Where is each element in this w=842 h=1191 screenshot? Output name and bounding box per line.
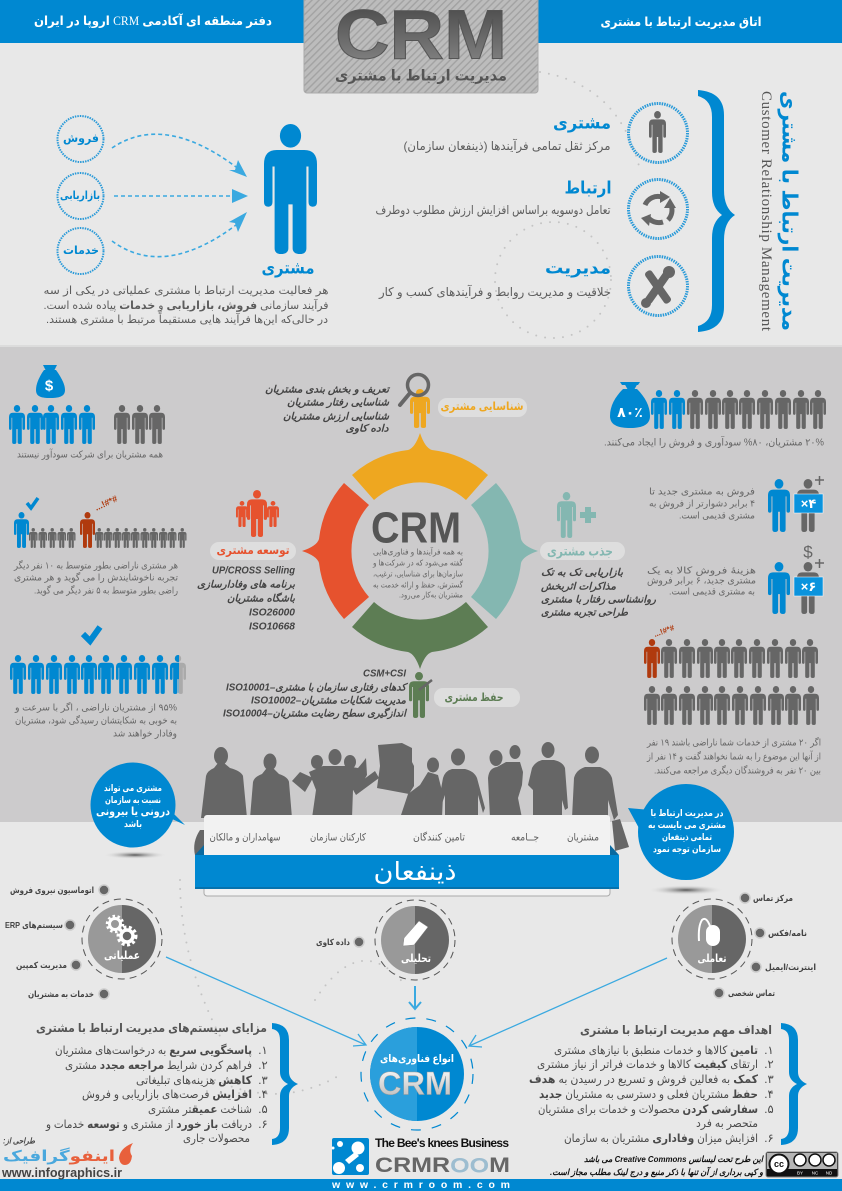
definition: management: مدیریت [545, 258, 611, 278]
system: interactive: تعاملی [698, 953, 726, 965]
stage: develop: برنامه های وفادارسازی [197, 580, 295, 590]
stakeholders card: ذینفعان [374, 858, 456, 886]
stat: profitable customers: همه مشتریان برای شرکت سودآور نیستند [17, 448, 163, 460]
stat: silent customers: بین ۲۰ نفر به فروشندگان دیگری مراجعه می‌کنند. [654, 764, 821, 776]
stakeholders card: کارکنان سازمان [310, 832, 366, 844]
system labels: داده کاوی [316, 937, 351, 948]
segment: retain [352, 602, 488, 669]
icon: mouse [706, 925, 720, 946]
crowd silhouettes [194, 742, 629, 855]
stat: word of mouth: ...!#*# [93, 493, 119, 513]
badge 6x [794, 577, 823, 596]
panel: goals: ۶. [764, 1133, 774, 1145]
stat: 6x cost: $ [803, 542, 813, 562]
stat: 80/20: ۸۰٪ [617, 404, 643, 420]
stat: 4x harder: ×۴ [801, 496, 816, 511]
callout right: تمامی ذینفعان [662, 832, 712, 842]
system labels: تماس شخصی [728, 988, 775, 999]
CRM room logo: The Bee's knees Business [375, 1136, 509, 1150]
panel: benefits: ۴. [258, 1089, 268, 1101]
bottom bar [0, 1179, 842, 1191]
definition: customer: مشتری [553, 114, 611, 134]
stat: 6x cost: مشتری جدید، ۶ برابر فروش [647, 576, 756, 586]
definition: customer [404, 104, 688, 162]
panel: benefits: محصولات جاری [183, 1133, 250, 1146]
arrows to customer [112, 134, 240, 257]
badge 4x [794, 494, 823, 513]
center logo CRM: CRM [371, 504, 461, 552]
icon: three people [236, 490, 279, 537]
stage: develop [197, 490, 296, 632]
stat: word of mouth [13, 493, 186, 596]
stage: identify: شناسایی رفتار مشتریان [287, 398, 390, 408]
CRM room logo: CRMR OO M [375, 1154, 510, 1177]
heading: اهداف مهم مدیریت ارتباط با مشتری [580, 1023, 772, 1037]
callout left [90, 762, 185, 859]
stat: profitable customers [9, 365, 165, 460]
stat: silent customers: ...!#*# [652, 623, 676, 639]
panel: goals [529, 1023, 807, 1146]
stat: word of mouth: راضی بطور متوسط به ۵ نفر دیگر می گوید. [34, 584, 178, 596]
icon: money bag [36, 365, 65, 398]
title panel [304, 0, 538, 93]
people row [9, 405, 95, 444]
icon: 80 percent bag [610, 382, 650, 428]
stage: develop: ISO10668 [249, 622, 295, 632]
panel: goals: حفظ مشتریان فعلی و دسترسی به مشتریان جدید [539, 1089, 758, 1102]
definition: relationship: ارتباط [564, 178, 612, 198]
panel: benefits: دریافت باز خورد از مشتری و توسعه خدمات و [45, 1119, 252, 1132]
stage: develop: توسعه مشتری [216, 545, 290, 558]
label: marketing: بازاریابی [60, 190, 100, 202]
center hub: انواع فناوری‌های [380, 1053, 454, 1065]
center description: گفته می‌شود که در شرکت‌ها و [372, 558, 463, 568]
stakeholders card [195, 815, 619, 896]
panel: benefits: شناخت عمیقتر مشتری [148, 1104, 252, 1117]
icon: check [27, 498, 38, 508]
logo mark [332, 1141, 364, 1174]
intro paragraph: فرآیند سازمانی فروش، بازاریابی و خدمات پیاده شده است. [44, 298, 329, 312]
stage: retain: کدهای رفتاری سازمان با مشتری–ISO10001 [226, 682, 408, 694]
panel: benefits: ۳. [258, 1075, 268, 1087]
panel: benefits [36, 1021, 298, 1146]
stat: complaint handling: به خوبی به شکایتشان رسیدگی شود، مشتریان [15, 714, 177, 726]
stage: identify: تعریف و بخش بندی مشتریان [265, 384, 390, 396]
stakeholders card: جــامعه [511, 832, 539, 844]
definition: relationship [376, 178, 688, 238]
center description: به همه فرآیندها و فناوری‌هایی [373, 546, 463, 556]
panel: benefits: ۱. [258, 1045, 268, 1057]
header left text: دفتر منطقه ای آکادمی CRM اروپا در ایران [34, 13, 272, 28]
stat: complaint handling: ۹۵% از مشتریان ناراضی ، اگر با سرعت و [14, 702, 178, 714]
designer logo [1, 1136, 133, 1180]
stat: word of mouth: هر مشتری ناراضی بطور متوسط به ۱۰ نفر دیگر [13, 560, 178, 572]
stage: retain: اندازگیری سطح رضایت مشتریان–ISO10004 [223, 706, 408, 720]
callout right: سازمان توجه نمود [653, 844, 721, 855]
stat: 6x cost: هزینهٔ فروش کالا به یک [647, 566, 756, 576]
stage: identify: شناسایی ارزش مشتریان [283, 412, 390, 422]
system: operational [82, 899, 162, 979]
callout right: مشتری می بایست به [648, 820, 726, 831]
center description [372, 546, 463, 600]
header right text: اتاق مدیریت ارتباط با مشتری [600, 15, 762, 29]
designer logo: www.infographics.ir [1, 1166, 122, 1180]
system labels: خدمات به مشتریان [28, 989, 94, 1000]
intro paragraph: هر فعالیت مدیریت ارتباط با مشتری عملیاتی در یکی از سه [44, 285, 329, 297]
icon: cycle arrows [645, 196, 672, 223]
license text [550, 1154, 765, 1178]
stat: 4x harder: ۴ برابر دشوارتر از فروش به [649, 498, 755, 510]
vertical heading english: Customer Relationship Management [758, 91, 774, 332]
panel: goals: ۱. [764, 1045, 774, 1057]
CRM room logo [332, 1136, 510, 1177]
stage: develop: UP/CROSS Selling [212, 566, 295, 576]
cycle ring [302, 433, 538, 669]
connector arrows [166, 957, 667, 1047]
panel: benefits: پاسخگویی سریع به درخواست‌های مشتریان [55, 1043, 252, 1058]
system: operational: عملیاتی [104, 950, 140, 962]
stat: word of mouth: تجربه ناخوشایندش را می گوید و هر مشتری [14, 572, 178, 584]
icon: person [409, 672, 429, 718]
stat: silent customers: اگر ۲۰ مشتری از خدمات شما ناراضی باشند ۱۹ نفر [646, 736, 821, 748]
stage: attract: بازاریابی تک به تک [541, 568, 623, 578]
definition: management [378, 256, 688, 316]
stage: retain: مدیریت شکایات مشتریان–ISO10002 [251, 696, 407, 706]
stage: attract: روانشناسی رفتار با مشتری [541, 594, 656, 606]
panel: goals: ۲. [764, 1059, 774, 1071]
icon: tools [641, 266, 675, 308]
panel: goals: افزایش میزان وفاداری مشتریان به سازمان [564, 1133, 758, 1146]
url: www.crmroom.com [331, 1179, 510, 1191]
cc badge: ND [826, 1170, 833, 1176]
stakeholders card: مشتریان [567, 832, 599, 844]
icon: person [649, 111, 666, 153]
icon: pencil [403, 921, 428, 946]
ribbon [195, 845, 619, 855]
callout left: نسبت به سازمان [105, 795, 161, 806]
system labels [5, 885, 816, 1000]
cc badge: BY [797, 1170, 803, 1176]
arrowheads [229, 160, 248, 232]
stat: complaint handling [10, 627, 186, 740]
system labels: نامه/فکس [768, 928, 807, 939]
stat: 6x cost: ×۶ [801, 579, 816, 594]
system labels: مدیریت کمپین [16, 960, 67, 971]
stat: profitable customers: $ [45, 378, 54, 394]
strip under ribbon [204, 885, 610, 896]
stat: silent customers [644, 623, 821, 776]
header bar [0, 0, 842, 43]
definition: management: خلاقیت و مدیریت روابط و فرآیندهای کسب و کار [378, 284, 611, 300]
panel: goals: ۳. [764, 1074, 774, 1086]
system: interactive [672, 899, 752, 979]
stage: retain: CSM+CSI [363, 668, 406, 680]
stage: develop: باشگاه مشتریان [227, 592, 295, 604]
cc badge: NC [812, 1170, 819, 1176]
subtitle: مدیریت ارتباط با مشتری [335, 68, 507, 84]
panel: goals: ارتقای کیفیت کالاها و خدمات فراتر از نیاز مشتری [537, 1059, 758, 1072]
stage: develop: ISO26000 [249, 608, 295, 618]
callout left: درونی یا بیرونی [96, 806, 170, 818]
system labels: اینترنت/ایمیل [765, 962, 816, 973]
stat: complaint handling: وفادار خواهند شد [113, 728, 177, 740]
license text: این طرح تحت لیسانس Creative Commons می باشد [584, 1154, 765, 1165]
callout right [628, 784, 734, 895]
system labels: مرکز تماس [753, 893, 793, 904]
icon: person with magnifier [410, 389, 430, 428]
stage: attract [540, 492, 656, 618]
panel: benefits: کاهش هزینه‌های تبلیغاتی [136, 1075, 252, 1088]
stage: attract: مذاکرات اثربخش [540, 582, 617, 592]
icon: person plus [557, 492, 576, 538]
segment: identify [352, 433, 488, 500]
cc badge: cc [774, 1159, 784, 1169]
system: analytical [375, 900, 455, 980]
callout right: در مدیریت ارتباط با [650, 808, 724, 819]
license text: و کپی برداری از آن تنها با ذکر منبع و درج لینک مطلب مجاز است. [550, 1166, 763, 1178]
heading: مزایای سیستم‌های مدیریت ارتباط با مشتری [36, 1021, 267, 1035]
callout left: باشد [124, 819, 142, 829]
stat: 4x harder: مشتری قدیمی است. [679, 510, 755, 522]
stage: identify: شناسایی مشتری [440, 401, 524, 413]
system: analytical: تحلیلی [401, 953, 431, 965]
stakeholders card: سهامداران و مالکان [210, 832, 280, 844]
brace [781, 1023, 807, 1145]
panel: goals: سفارشی کردن محصولات و خدمات برای مشتریان [538, 1104, 758, 1117]
panel: goals: ۴. [764, 1089, 774, 1101]
icon: big check [83, 627, 100, 641]
cc badge [766, 1152, 838, 1177]
brace [272, 1023, 298, 1145]
panel: goals: کمک به فعالین فروش و تسریع در رسیدن به هدف [529, 1074, 758, 1087]
stat: 6x cost [647, 542, 824, 614]
bullets [65, 885, 765, 999]
panel: benefits: ۲. [258, 1060, 268, 1072]
label: sales: فروش [63, 133, 99, 146]
definition: customer: مرکز ثقل تمامی فرآیندها (ذینفعان سازمان) [404, 138, 610, 154]
center description: سازمان‌ها برای شناسایی، ترغیب، [373, 570, 463, 578]
definition: relationship: تعامل دوسویه براساس افزایش ارزش مطلوب دوطرف [376, 203, 610, 218]
segment: attract [471, 483, 538, 619]
designer logo: اینفوگرافیک [3, 1146, 115, 1164]
stat: 4x harder [649, 476, 824, 532]
big customer icon [264, 124, 317, 254]
callout left: مشتری می تواند [104, 783, 162, 794]
panel: benefits: افزایش فرصت‌های بازاریابی و فروش [82, 1089, 252, 1102]
stat: silent customers: از آنها این موضوع را به شما نخواهند گفت و ۱۴ نفر از [646, 750, 821, 762]
center description: گسترش، حفظ و ارائه خدمت به [373, 580, 463, 590]
stage: attract: طراحی تجربه مشتری [541, 608, 629, 618]
process circles [58, 116, 104, 274]
stage: attract: جذب مشتری [547, 544, 613, 558]
stage: identify [265, 374, 527, 434]
stakeholders card: تامین کنندگان [413, 832, 465, 844]
segment: develop [302, 483, 369, 619]
center hub: CRM [378, 1066, 452, 1102]
stat: 4x harder: فروش به مشتری جدید تا [649, 486, 755, 498]
icon: gears [107, 916, 136, 945]
grey section background [0, 345, 842, 822]
system labels: اتوماسیون نیروی فروش [10, 885, 94, 896]
stage: retain [223, 668, 520, 720]
stage: retain: حفظ مشتری [444, 692, 504, 704]
panel: goals: متحصر به فرد [696, 1118, 758, 1131]
decorative dots [180, 72, 640, 1094]
panel: benefits: ۶. [258, 1119, 268, 1131]
panel: goals: ۵. [764, 1104, 774, 1116]
intro paragraph: در حالی‌که این‌ها فرآیند هایی مستقیماً مرتبط با مشتری هستند. [46, 311, 328, 326]
center hub [361, 1018, 473, 1130]
stat: 80/20 [604, 382, 826, 448]
vertical heading persian: مدیریت ارتباط با مشتری [778, 91, 800, 331]
panel: benefits: ۵. [258, 1104, 268, 1116]
system labels: سیستم‌های ERP [5, 920, 63, 930]
center description: مشتریان به‌کار می‌رود. [399, 590, 463, 600]
big customer label: مشتری [262, 258, 314, 278]
stat: 6x cost: به مشتری قدیمی است. [669, 586, 755, 598]
stat: 80/20: ۲۰% مشتریان، ۸۰% سودآوری و فروش را ایجاد می‌کنند. [604, 436, 824, 448]
brace [698, 90, 735, 332]
designer logo: طراحی از: [3, 1136, 36, 1146]
label: services: خدمات [63, 245, 99, 257]
panel: goals: تامین کالاها و خدمات منطبق با نیازهای مشتری [554, 1045, 758, 1058]
intro paragraph [44, 285, 329, 326]
stage: identify: داده کاوی [346, 424, 389, 434]
panel: benefits: فراهم کردن شرایط مراجعه مجدد مشتری [65, 1060, 252, 1073]
